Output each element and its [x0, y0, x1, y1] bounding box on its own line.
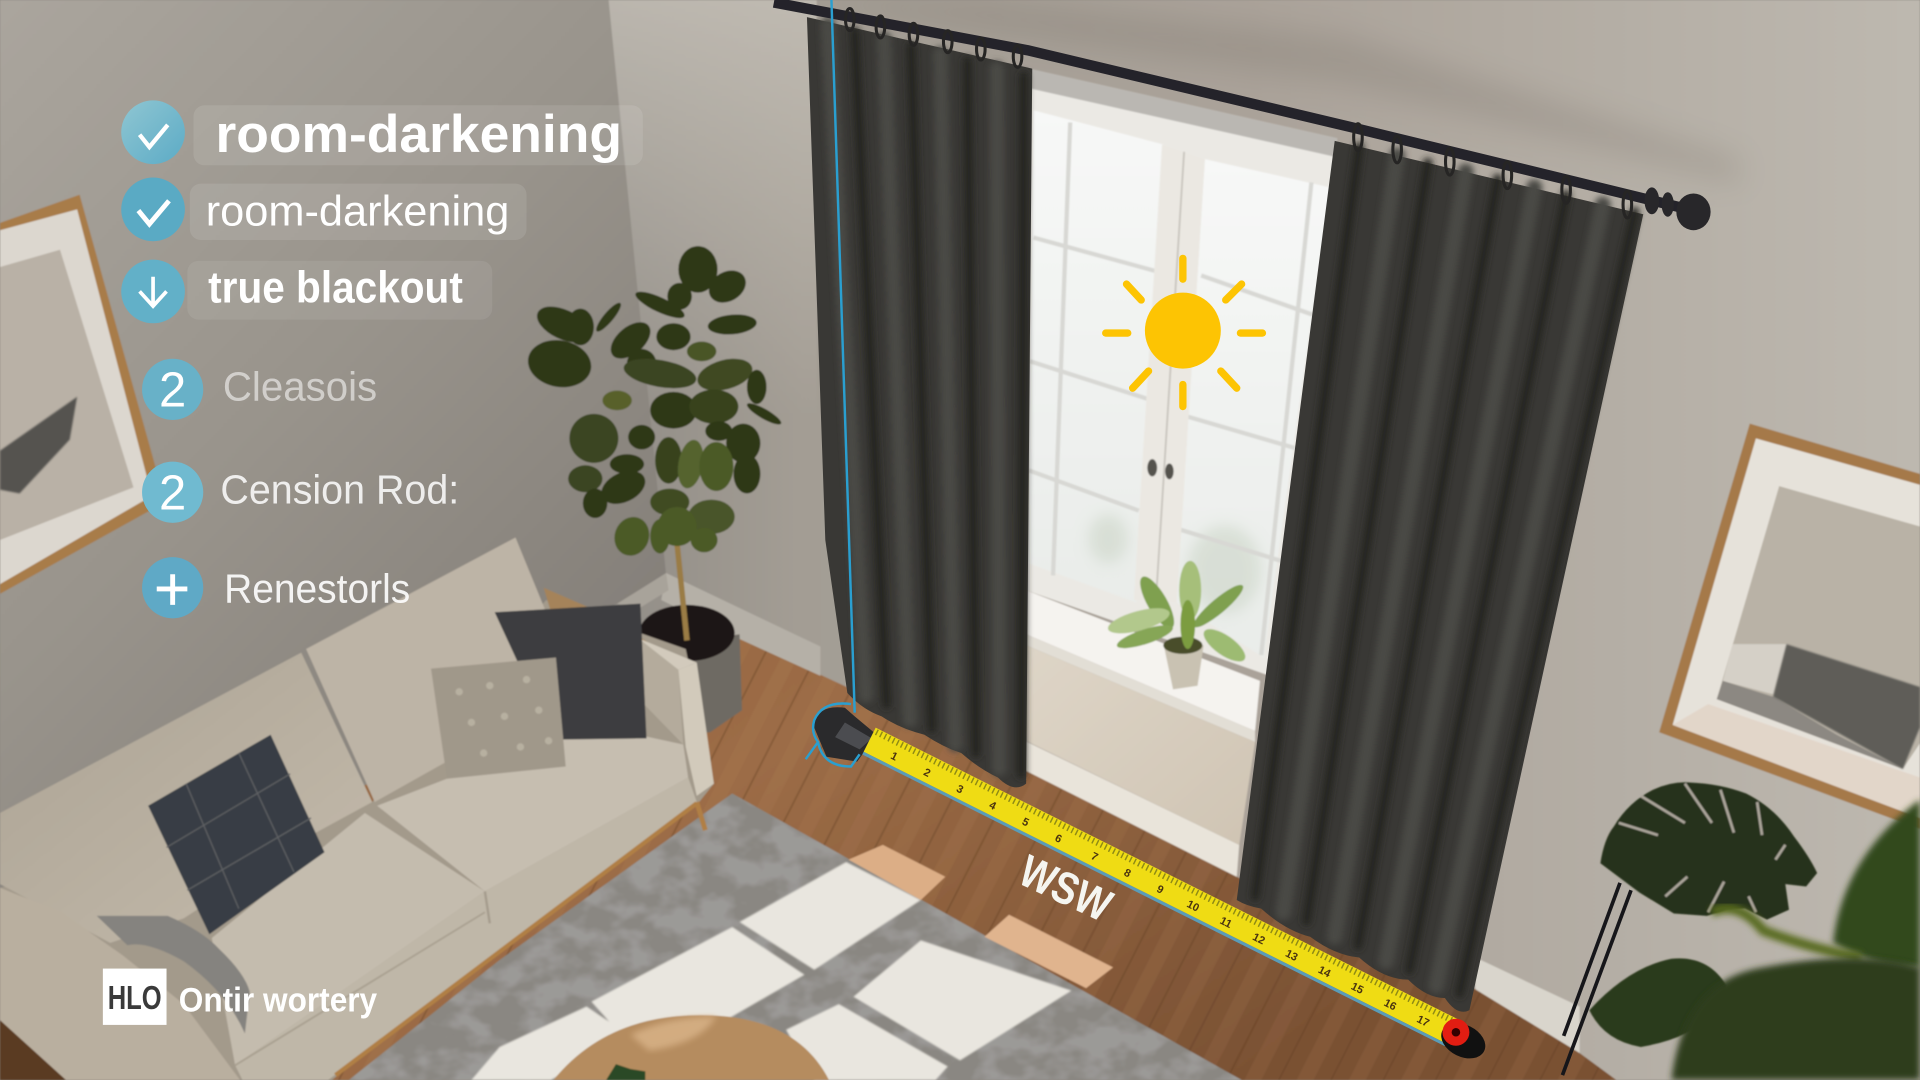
tape blade: 7 [1089, 850, 1100, 864]
right foreground plant [1562, 782, 1920, 1080]
footer logo [103, 969, 167, 1025]
window central mullion [1134, 144, 1205, 602]
list row: room-darkening heading: room-darkening [216, 105, 622, 164]
tape blade: 15 [1349, 981, 1365, 997]
view through window [1089, 514, 1261, 613]
right framed picture [1659, 424, 1920, 829]
sofa floor corner [0, 1020, 66, 1080]
sofa back cushion left [0, 653, 372, 943]
sofa left seat [212, 813, 485, 1065]
tape blade: 6 [1053, 832, 1064, 846]
left wall [0, 0, 666, 857]
tape blade: 16 [1382, 997, 1398, 1013]
curtain rings [846, 9, 1632, 218]
tape blade: 1 [889, 750, 899, 764]
measuring tape [806, 704, 1491, 1065]
window sill plant [1105, 561, 1250, 689]
rod shadow on wall [796, 0, 1739, 184]
rug [349, 793, 1242, 1080]
grey throw [97, 916, 250, 1033]
fiddle leaf plant [524, 246, 783, 735]
tape blade: 3 [954, 783, 965, 796]
rod finial [1644, 187, 1711, 230]
tape end cap [1435, 1016, 1491, 1065]
list row: Cension Rod [142, 462, 459, 523]
window sill [1026, 590, 1260, 731]
list row: Cension Rod: Cension Rod: [220, 466, 459, 512]
tape blade: 17 [1415, 1013, 1431, 1030]
tape blade: 8 [1122, 867, 1133, 880]
list row: Cleasois: Cleasois [223, 363, 377, 409]
list row: Renestorls [142, 557, 410, 618]
window top shadow band [1029, 69, 1337, 157]
tape blade: 14 [1316, 964, 1333, 981]
list row: Cleasois: 2 [159, 364, 186, 418]
monstera leaf [1600, 782, 1817, 920]
rug sunlight panes [471, 862, 1071, 1080]
list row: true blackout: true blackout [208, 263, 463, 312]
back wall [588, 0, 1920, 1080]
window handles [1147, 459, 1174, 479]
window frame [1026, 69, 1337, 686]
curtain rod [774, 2, 1711, 230]
left framed picture [0, 195, 165, 594]
list row: room-darkening [121, 178, 527, 241]
tape blade: 2 [921, 766, 932, 780]
sofa front band [235, 778, 697, 1080]
list row: room-darkening heading [121, 100, 643, 165]
plaid cushion [148, 735, 324, 934]
tape blade [862, 728, 1458, 1046]
icon: sun [1106, 258, 1262, 407]
wall upper highlight near corner [609, 0, 817, 416]
window glass panes [1029, 110, 1330, 658]
left curtain [807, 17, 1032, 787]
sofa wood rail and leg [336, 802, 705, 1075]
patterned cushion [431, 658, 566, 779]
tape blade: 4 [987, 799, 999, 813]
dark cushion [495, 604, 647, 740]
tape blade: 11 [1218, 915, 1234, 931]
sofa base [0, 600, 714, 1080]
sofa right seat [377, 735, 688, 891]
sofa arm wood [544, 588, 649, 643]
sofa [0, 538, 714, 1080]
tape blade: 5 [1020, 816, 1031, 829]
list row: room-darkening: room-darkening [206, 187, 509, 235]
sofa back cushion right [306, 538, 557, 802]
tape label: WSW [1012, 845, 1120, 932]
small table plant [606, 1064, 645, 1080]
large blurred leaf [1833, 800, 1920, 967]
window muntins [1029, 122, 1313, 655]
plant pot [639, 605, 742, 735]
tape blade: 9 [1155, 883, 1165, 897]
list row: Cension Rod: 2 [159, 466, 186, 520]
list row: true blackout [121, 260, 492, 323]
list row: Renestorls: Renestorls [224, 565, 410, 611]
blurred stem [1712, 909, 1861, 958]
round table [553, 1015, 829, 1080]
floor [0, 637, 1616, 1080]
sofa arm [638, 638, 683, 744]
floor sunlight patches [849, 845, 945, 900]
tape blade: 13 [1283, 948, 1300, 964]
tape blade: 12 [1250, 931, 1267, 947]
sofa left end [0, 888, 240, 1080]
tape blade: 10 [1185, 898, 1201, 915]
wall under window [1026, 645, 1255, 845]
blue measuring string [831, 0, 855, 713]
list row: Cleasois [142, 359, 377, 420]
lower blurred leaves [1589, 958, 1727, 1047]
tape hook [806, 704, 877, 767]
right curtain [1237, 141, 1643, 1012]
footer brand name: Ontir wortery [179, 981, 377, 1019]
baseboards [617, 573, 1580, 1053]
footer logo: HLO [108, 980, 162, 1017]
